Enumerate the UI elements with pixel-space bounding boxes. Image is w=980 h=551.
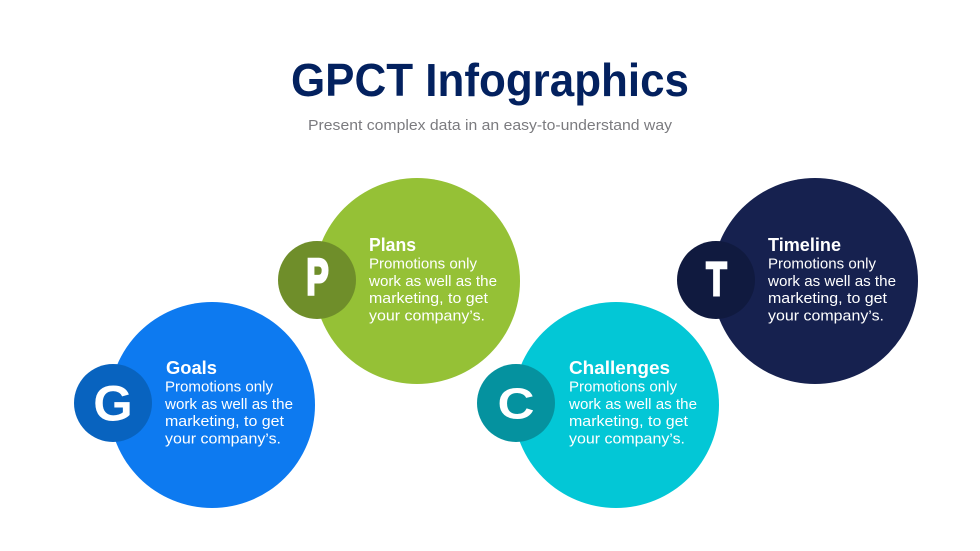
title: GPCT Infographics <box>291 54 689 106</box>
goals text: marketing, to get <box>165 413 285 430</box>
icon: letter C: C <box>498 380 534 428</box>
icon: letter T: T <box>706 253 727 306</box>
timeline circle <box>712 178 918 384</box>
challenges text: your company’s. <box>569 430 685 448</box>
plans text: your company’s. <box>369 308 485 324</box>
timeline heading: Timeline <box>768 235 841 255</box>
challenges text: work as well as the <box>568 396 697 413</box>
plans text: Promotions only <box>369 256 477 272</box>
challenges text: Promotions only <box>569 378 677 396</box>
goals text: work as well as the <box>164 396 293 413</box>
plans text: marketing, to get <box>369 290 489 307</box>
icon: letter T <box>677 241 755 319</box>
timeline text: your company’s. <box>768 308 884 324</box>
icon: letter C <box>477 364 555 442</box>
goals text: Promotions only <box>165 378 273 396</box>
goals circle <box>109 302 315 508</box>
challenges circle <box>513 302 719 508</box>
timeline text <box>767 256 896 324</box>
goals text <box>164 378 293 448</box>
plans text: work as well as the <box>368 273 497 290</box>
challenges text <box>568 378 697 448</box>
timeline text: marketing, to get <box>768 290 888 307</box>
panel: challenges <box>477 302 719 508</box>
plans circle <box>314 178 520 384</box>
icon: letter G <box>74 364 152 442</box>
challenges heading: Challenges <box>569 358 670 378</box>
icon: letter P: P <box>306 248 329 306</box>
icon: letter G: G <box>93 376 133 432</box>
plans text <box>368 256 497 324</box>
icon: letter P <box>278 241 356 319</box>
subtitle: Present complex data in an easy-to-understand way <box>308 117 673 134</box>
timeline text: work as well as the <box>767 273 896 290</box>
goals heading: Goals <box>166 358 217 378</box>
challenges text: marketing, to get <box>569 413 689 430</box>
timeline text: Promotions only <box>768 256 876 272</box>
panel: timeline <box>677 178 918 384</box>
goals text: your company’s. <box>165 430 281 448</box>
plans heading: Plans <box>369 235 416 255</box>
panel: goals <box>74 302 315 508</box>
panel: plans <box>278 178 520 384</box>
